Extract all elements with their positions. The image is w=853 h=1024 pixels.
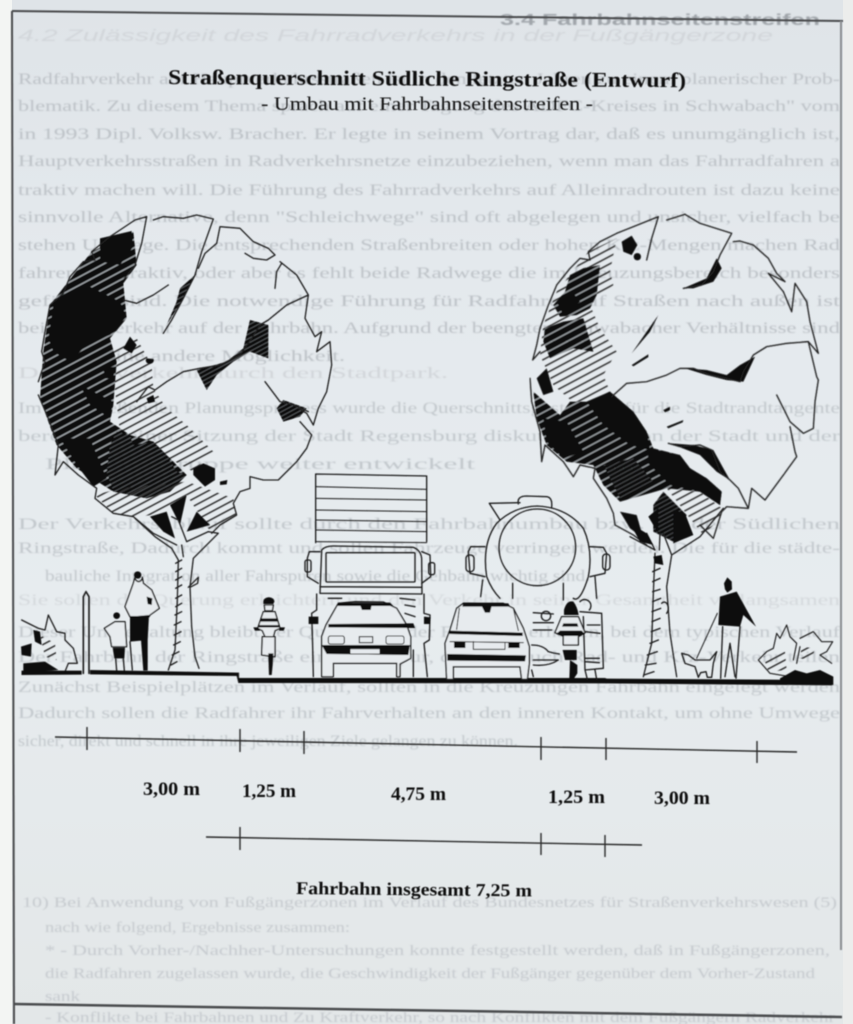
- dimension line: full cross-section: [55, 727, 797, 763]
- illustration: cyclist on left lane: [253, 597, 285, 675]
- show-through paragraph one: Der Radverkehr durch den Stadtpark.: [18, 365, 448, 382]
- illustration: left tree trunk: [135, 517, 218, 670]
- show-through footnotes: nach wie folgend, Ergebnisse zusammen:: [45, 920, 350, 936]
- dimension labels: [143, 780, 711, 809]
- show-through paragraph four: Dadurch sollen die Radfahrer ihr Fahrverhalten an den inneren Kontakt, um ohne Umwege: [18, 705, 840, 722]
- crown outline: [38, 215, 332, 545]
- tanker shell: [485, 506, 590, 599]
- left page margin: [0, 0, 12, 1024]
- show-through footnotes: * - Durch Vorher-/Nachher-Untersuchungen konnte festgestellt werden, daß in Fußgängerzonen,: [45, 943, 830, 959]
- show-through heading: 3.4 Fahrbahnseitenstreifen: [500, 12, 820, 29]
- show-through paragraph four: Dieser Umgestaltung bleibt der Querschnitt der Fahrbahn erhalten, bei dem typischen Verlauf: [18, 624, 841, 641]
- label: left side strip width: 1,25 m: [242, 782, 297, 802]
- show-through subheading: 4.2 Zulässigkeit des Fahrradverkehrs in der Fußgängerzone: [18, 26, 773, 45]
- label: left sidewalk width: 3,00 m: [143, 780, 201, 800]
- hatched shadow side: [110, 338, 213, 472]
- label: right sidewalk width: 3,00 m: [654, 789, 711, 809]
- illustration: child pedestrian: [104, 612, 127, 671]
- show-through paragraph one: Hauptverkehrsstraßen in Radverkehrsnetze einzubeziehen, wenn man das Fahrradfahren a: [18, 153, 840, 170]
- right page margin: [843, 0, 853, 1024]
- show-through paragraph one: bei Lkw-Verkehr auf der Fahrbahn. Aufgrund der beengten Schwabacher Verhältnisse sind: [18, 320, 840, 337]
- label: core lane width: 4,75 m: [391, 785, 447, 805]
- dark foliage masses: [533, 236, 755, 542]
- front car: [322, 602, 415, 677]
- show-through paragraph four: sicher, direkt und schnell in ihre jeweiligen Ziele gelangen zu können.: [18, 733, 518, 750]
- show-through paragraph two: Im anschließenden Planungsprozess wurde die Querschnittsgestaltung für die Stadtrandtangente: [18, 400, 840, 417]
- illustration: right tree crown: [530, 214, 818, 545]
- show-through footnotes: [22, 895, 837, 1024]
- illustration: right tree trunk: [630, 508, 723, 677]
- title: Straßenquerschnitt Südliche Ringstraße (Entwurf): [168, 65, 686, 92]
- illustration: left tree crown: [38, 215, 332, 545]
- show-through paragraph one: sinnvolle Alternative, denn "Schleichwege" sind oft abgelegen und unsicher, vielfach be: [18, 209, 840, 226]
- show-through paragraph one: traktiv machen will. Die Führung des Fahrradverkehrs auf Alleinradrouten ist dazu keine: [18, 182, 840, 199]
- show-through paragraph three: [18, 516, 840, 585]
- hatchback car: [445, 603, 529, 679]
- show-through paragraph one: [18, 71, 841, 382]
- show-through paragraph three: bauliche Integration aller Fahrspuren sowie die Gehbahn wichtig sind.: [45, 568, 590, 585]
- dog: [682, 652, 717, 677]
- show-through footnotes: die Radfahren zugelassen wurde, die Geschwindigkeit der Fußgänger gegenüber dem Vorher-Zustand: [45, 966, 816, 982]
- illustration: truck with box body: [305, 474, 435, 677]
- show-through paragraph three: Der Verkehrsablauf sollte durch den Fahrbahnumbau bzw. bei der Südlichen: [18, 516, 840, 533]
- subtitle: - Umbau mit Fahrbahnseitenstreifen -: [261, 95, 593, 115]
- show-through paragraph one: blematik. Zu diesem Thema sprach auf einer Tagung des ADFC-Kreises in Schwabach" vom: [18, 98, 841, 115]
- show-through footnotes: sank: [45, 989, 81, 1005]
- illustration: adult pedestrian: [125, 571, 159, 671]
- crown outline: [530, 214, 818, 545]
- show-through paragraph two: bereits bei einer Sitzung der Stadt Regensburg diskutiert und von der Stadt und der: [18, 428, 841, 445]
- hatched shadow side: [540, 238, 617, 408]
- man: [697, 577, 756, 678]
- show-through footnotes: 10) Bei Anwendung von Fußgängerzonen im Verlauf des Bundesnetzes für Straßenverkehrswesen (5): [22, 895, 837, 911]
- tanker hatch: [489, 496, 552, 520]
- show-through paragraph one: stehen Umwege. Die entsprechenden Straßenbreiten oder hohen Kfz-Mengen machen Rad: [18, 237, 840, 254]
- tanker lower cab: [481, 577, 603, 679]
- show-through paragraph four: [18, 592, 841, 750]
- road surface: [22, 670, 832, 685]
- show-through paragraph four: Sie sollen die Querung erleichtern und den Verkehr in seiner Gesamtheit verlangsamen: [18, 592, 840, 609]
- dark foliage masses: [40, 231, 307, 538]
- truck cab: [305, 546, 435, 594]
- show-through paragraph one: in 1993 Dipl. Volksw. Bracher. Er legte in seinem Vortrag dar, daß es unumgänglich ist,: [18, 126, 840, 143]
- total carriageway label: Fahrbahn insgesamt 7,25 m: [296, 878, 532, 900]
- illustration: bollard: [83, 592, 89, 673]
- show-through paragraph two: Planungsgruppe weiter entwickelt: [45, 456, 476, 473]
- illustration: right shrub: [758, 625, 833, 685]
- tank end circle: [499, 509, 576, 586]
- show-through paragraph two: [18, 400, 841, 473]
- show-through paragraph one: fahren unattraktiv, oder aber es fehlt beide Radwege die im Kreuzungsbereich besonders: [18, 265, 840, 282]
- show-through paragraph one: gefährdet sind. Die notwendige Führung für Radfahrer auf Straßen nach außen ist: [18, 293, 841, 310]
- cyclist on right lane: [555, 601, 585, 679]
- truck lower body: [309, 594, 431, 677]
- tanker wheel detail: [541, 611, 551, 621]
- tanker mirrors: [466, 547, 610, 577]
- illustration: left shrub: [21, 615, 77, 673]
- illustration: tanker truck: [445, 496, 610, 679]
- dimension line: carriageway: [206, 827, 642, 857]
- show-through paragraph four: Zunächst Beispielplätzen im Verlauf, sollten in die Kreuzungen Fahrbahn eingelegt werden: [18, 679, 840, 696]
- show-through paragraph one: Radfahrverkehr auf Hauptverkehrsstraßen ist in den letzten Jahren zu einem planerischer Prob-: [18, 71, 840, 88]
- show-through paragraph one: kaum eine andere Möglichkeit.: [45, 348, 345, 365]
- label: right side strip width: 1,25 m: [548, 788, 606, 808]
- show-through paragraph four: Der Fahrbahn der Ringstraße eine Fahrspur, die sich auch Rad- und Kfz-Verkehr teilen: [18, 649, 840, 666]
- show-through paragraph three: Ringstraße, Dadurch kommt und sollen Fahrzeuge verringert werden. Die für die städte-: [18, 540, 840, 557]
- illustration: man with dog on leash: [682, 577, 756, 678]
- truck box: [316, 474, 427, 543]
